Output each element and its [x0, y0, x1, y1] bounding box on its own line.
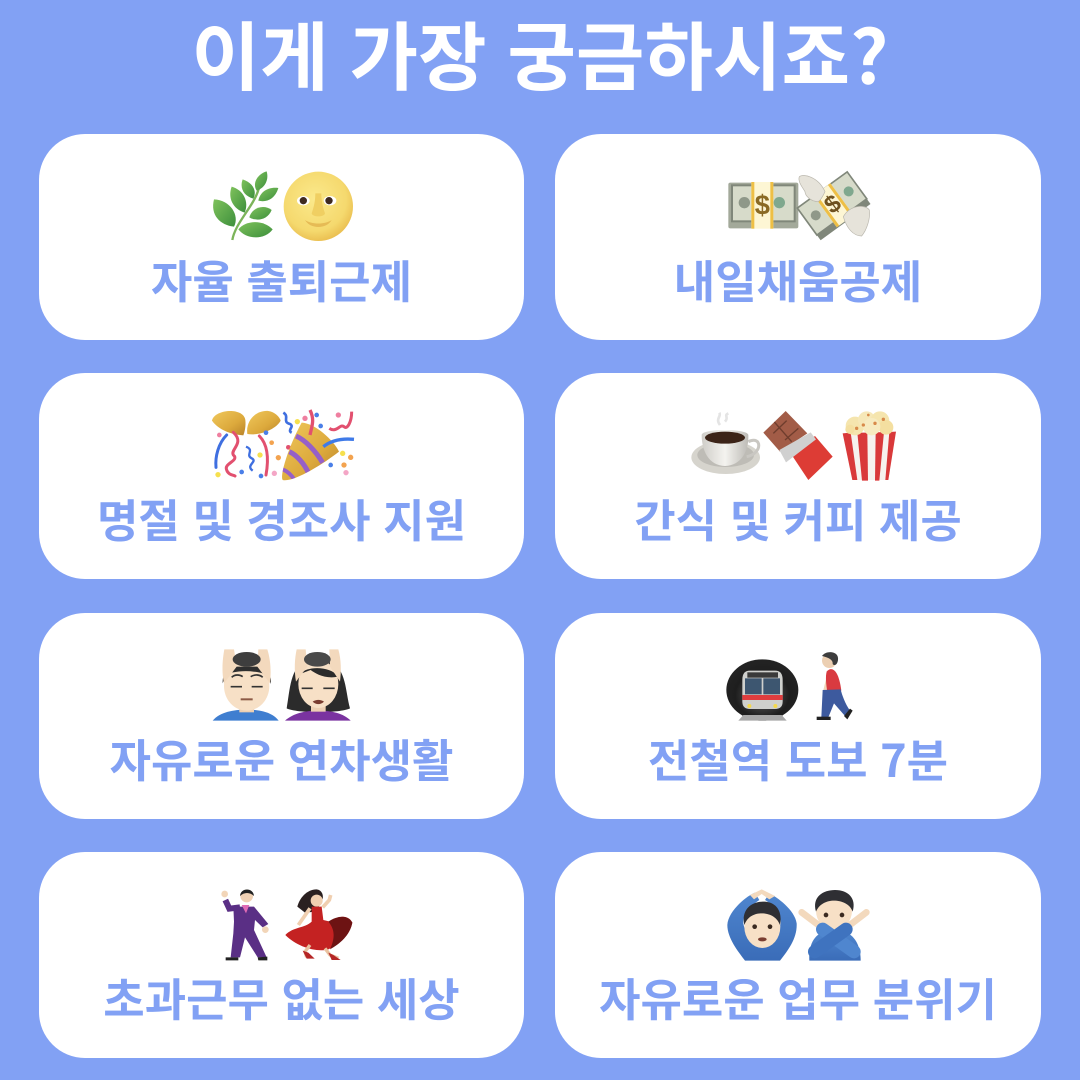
label: 전철역 도보 7분	[648, 725, 948, 790]
icon: banknote and flying money: $	[755, 190, 770, 221]
icon: confetti ball and party popper	[212, 409, 354, 480]
icon: coffee, chocolate and popcorn	[691, 411, 896, 481]
label: 자율 출퇴근제	[151, 246, 412, 311]
label: 초과근무 없는 세상	[103, 964, 460, 1029]
icon: banknote and flying money	[728, 170, 870, 240]
panel: 간식 및 커피 제공	[555, 373, 1041, 579]
panel: 명절 및 경조사 지원	[39, 373, 524, 579]
panel: 초과근무 없는 세상	[39, 852, 524, 1058]
icon: man and woman getting head massage	[212, 649, 351, 721]
panel: 자유로운 연차생활	[39, 613, 524, 819]
label: 자유로운 연차생활	[110, 725, 453, 790]
icon: man making O and man making X	[727, 889, 870, 961]
label: 자유로운 업무 분위기	[599, 964, 997, 1029]
panel: 내일채움공제	[555, 134, 1041, 340]
panel: 자유로운 업무 분위기	[555, 852, 1041, 1058]
title: 이게 가장 궁금하시죠?	[192, 0, 888, 106]
label: 내일채움공제	[674, 246, 922, 311]
label: 명절 및 경조사 지원	[97, 485, 466, 550]
icon: herb and full moon	[213, 171, 353, 241]
icon: train in tunnel and walking man	[726, 652, 853, 721]
icon: dancing man and dancing woman	[221, 889, 352, 960]
label: 간식 및 커피 제공	[634, 485, 962, 550]
panel: 전철역 도보 7분	[555, 613, 1041, 819]
panel: 자율 출퇴근제	[39, 134, 524, 340]
icon: banknote and flying money: $	[820, 189, 847, 220]
